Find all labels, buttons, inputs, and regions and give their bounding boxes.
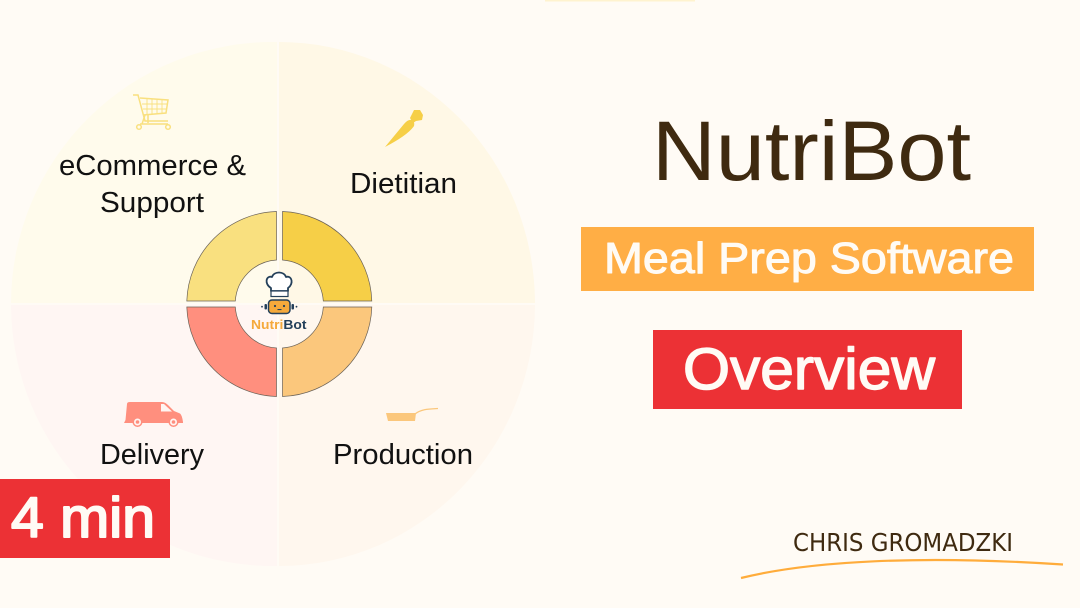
icon: frying pan bbox=[386, 408, 438, 421]
icon: shopping cart bbox=[133, 95, 170, 129]
banner: Meal Prep Software bbox=[581, 227, 1034, 291]
label: eCommerce & Support: eCommerce & bbox=[59, 150, 246, 182]
signature: Chris Gromadzki bbox=[741, 528, 1063, 578]
donut chart: four segments bbox=[187, 212, 372, 396]
label: Delivery: Delivery bbox=[100, 439, 204, 471]
icon: carrot bbox=[385, 110, 423, 147]
panel: quadrant wheel background bbox=[11, 42, 535, 566]
icon: delivery van bbox=[124, 402, 183, 427]
icon: NutriBot chef robot logo bbox=[251, 272, 307, 332]
label: Production: Production bbox=[333, 439, 473, 471]
text: Support bbox=[100, 187, 204, 219]
signature: Chris Gromadzki: CHRIS GROMADZKI bbox=[793, 528, 1013, 557]
banner: Overview: Overview bbox=[683, 337, 936, 402]
banner: Meal Prep Software: Meal Prep Software bbox=[604, 234, 1014, 283]
title: NutriBot bbox=[652, 104, 971, 198]
logo wordmark: NutriBot bbox=[251, 317, 307, 332]
badge: 4 min: 4 min bbox=[11, 486, 155, 550]
label: Dietitian: Dietitian bbox=[350, 168, 457, 200]
banner: Overview bbox=[653, 330, 962, 409]
badge: 4 min bbox=[0, 479, 170, 558]
